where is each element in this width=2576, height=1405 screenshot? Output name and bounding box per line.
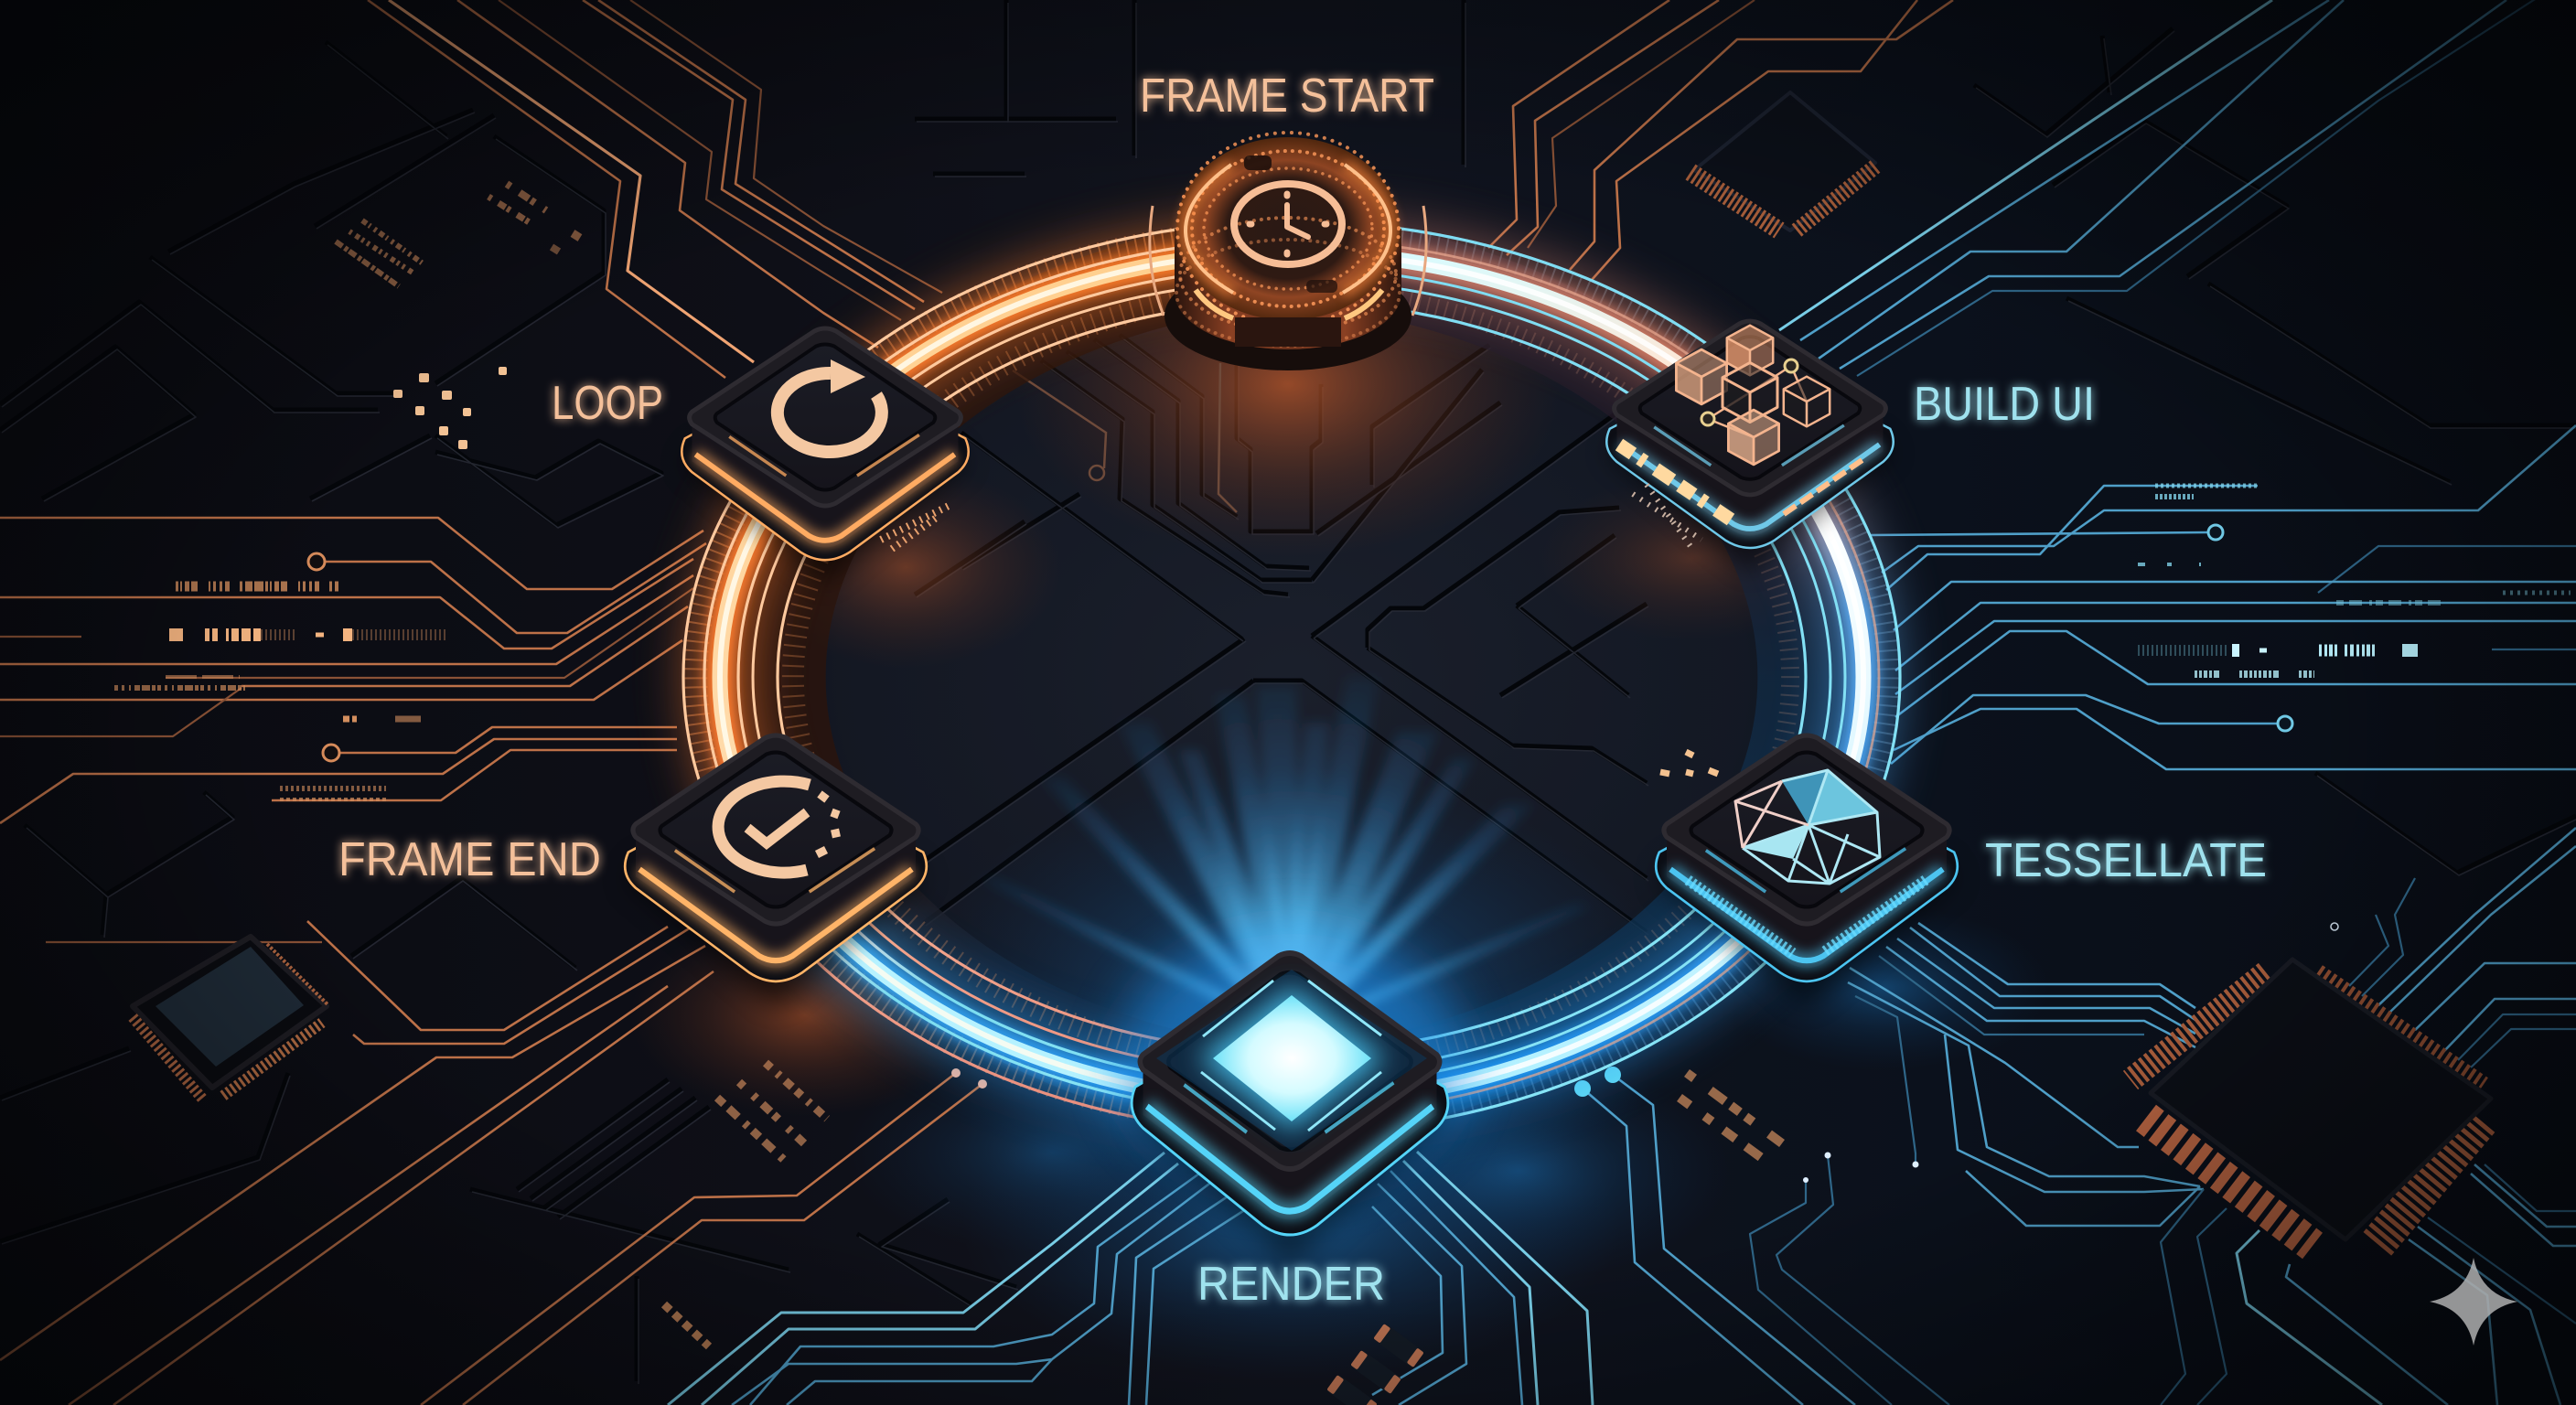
blue trace terminals — [1574, 525, 2338, 1183]
icon: loop arrow — [778, 359, 882, 452]
icon: glowing render diamond — [1213, 995, 1371, 1121]
node: frame start clock cylinder — [1150, 133, 1426, 370]
node: render — [1118, 933, 1465, 1239]
label: loop: LOOP — [552, 377, 663, 430]
node: tessellate — [1656, 735, 1958, 985]
label: render: RENDER — [1197, 1258, 1385, 1311]
label: tessellate: TESSELLATE — [1985, 834, 2267, 887]
blue circuit traces — [668, 0, 2576, 1405]
icon: tessellated mesh — [1735, 770, 1880, 884]
label: frame end: FRAME END — [338, 833, 601, 886]
icon: frame end check — [718, 781, 840, 873]
orange barcode data marks — [114, 184, 1782, 1346]
light rays from render node — [979, 677, 1592, 1034]
node: build ui — [1606, 321, 1894, 552]
chip: small bottom-left — [133, 937, 327, 1099]
icon: sparkle watermark — [2430, 1258, 2517, 1346]
node: loop — [682, 328, 969, 563]
warm and cool floor reflections — [631, 210, 2049, 1381]
label: build ui: BUILD UI — [1914, 378, 2095, 431]
capacitors below render — [1326, 1323, 1424, 1405]
ring: right blue arc — [1292, 221, 1900, 1132]
icon: build ui cubes — [1676, 326, 1830, 465]
node: frame end — [625, 735, 927, 985]
ring: left orange arc — [683, 221, 1292, 1132]
orange trace terminals and solder dots — [308, 363, 1237, 1089]
orange circuit traces — [0, 0, 1953, 1405]
icon: clock — [1234, 184, 1342, 264]
blue barcode data marks — [2138, 486, 2571, 674]
chip: upper right — [1690, 92, 1875, 231]
chip: large bottom right — [2131, 960, 2491, 1246]
label: frame start: FRAME START — [1140, 70, 1434, 123]
